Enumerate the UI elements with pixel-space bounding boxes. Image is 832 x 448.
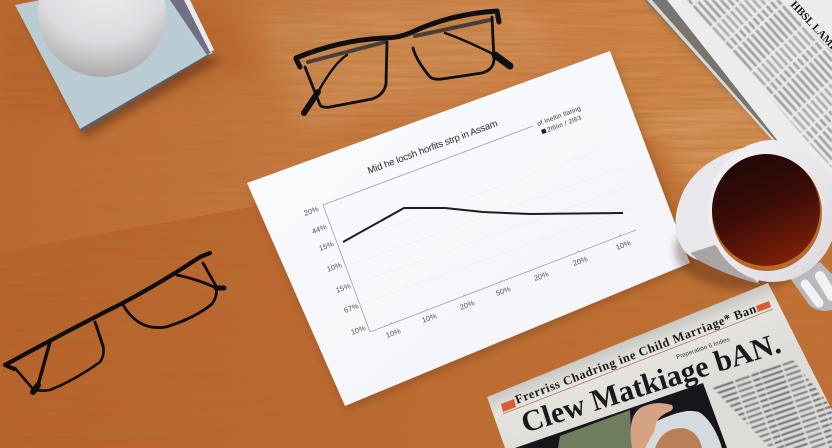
x axis labels: 20% <box>572 254 589 268</box>
right lens <box>122 263 216 328</box>
cup rim <box>708 140 832 282</box>
white coaster with ceramic sphere <box>15 0 222 138</box>
top-right open newspaper <box>645 0 832 190</box>
subheading: Preperation 6 Indies <box>676 337 731 361</box>
y axis labels: 44% <box>311 222 328 236</box>
x axis labels: 10% <box>421 311 438 325</box>
x axis labels: 10% <box>615 238 632 252</box>
folded temples <box>308 20 490 62</box>
top bar with bridge <box>5 253 210 369</box>
y axis labels: 15% <box>335 281 352 295</box>
white chart sheet <box>247 51 694 411</box>
tea surface <box>712 154 820 266</box>
large headline: Clew Matkiage bAN. <box>517 327 785 440</box>
chart legend: 2l6lin / 2l63 <box>546 115 583 134</box>
article text columns <box>712 360 832 448</box>
y axis labels: 10% <box>326 260 343 274</box>
x axis labels: 50% <box>495 284 512 298</box>
top glasses <box>296 11 510 113</box>
y axis labels: 15% <box>318 239 335 253</box>
data line <box>343 208 623 242</box>
faint grid lines <box>338 150 630 305</box>
top bar with bridge <box>296 11 499 67</box>
x axis labels: 10% <box>385 326 402 340</box>
bottom-right newspaper <box>487 283 832 448</box>
y axis labels: 10% <box>350 323 367 337</box>
amber tea edge <box>712 155 822 271</box>
small headline: Frerriss Chadring ine Child Marriage* Ban <box>513 302 758 407</box>
left lens <box>15 345 104 391</box>
left lens <box>305 42 387 107</box>
chart axes <box>323 126 636 332</box>
chart legend: of Inellin tlating <box>536 105 582 128</box>
red corner tags <box>501 399 516 412</box>
x axis labels <box>385 238 632 340</box>
y axis labels: 67% <box>343 301 360 315</box>
y axis labels <box>303 204 367 337</box>
bottom-left glasses <box>5 253 224 392</box>
cup handle <box>790 262 832 311</box>
chart title: Mid he locsh horfits strp in Assam <box>366 118 499 177</box>
tea cup <box>675 140 832 311</box>
y axis labels: 20% <box>303 204 320 218</box>
x axis labels: 20% <box>533 269 550 283</box>
ceramic sphere <box>38 0 166 77</box>
x axis labels: 20% <box>459 298 476 312</box>
right lens <box>413 17 494 79</box>
news photo <box>515 383 727 448</box>
cup body <box>676 148 790 283</box>
folded temples <box>38 342 50 385</box>
